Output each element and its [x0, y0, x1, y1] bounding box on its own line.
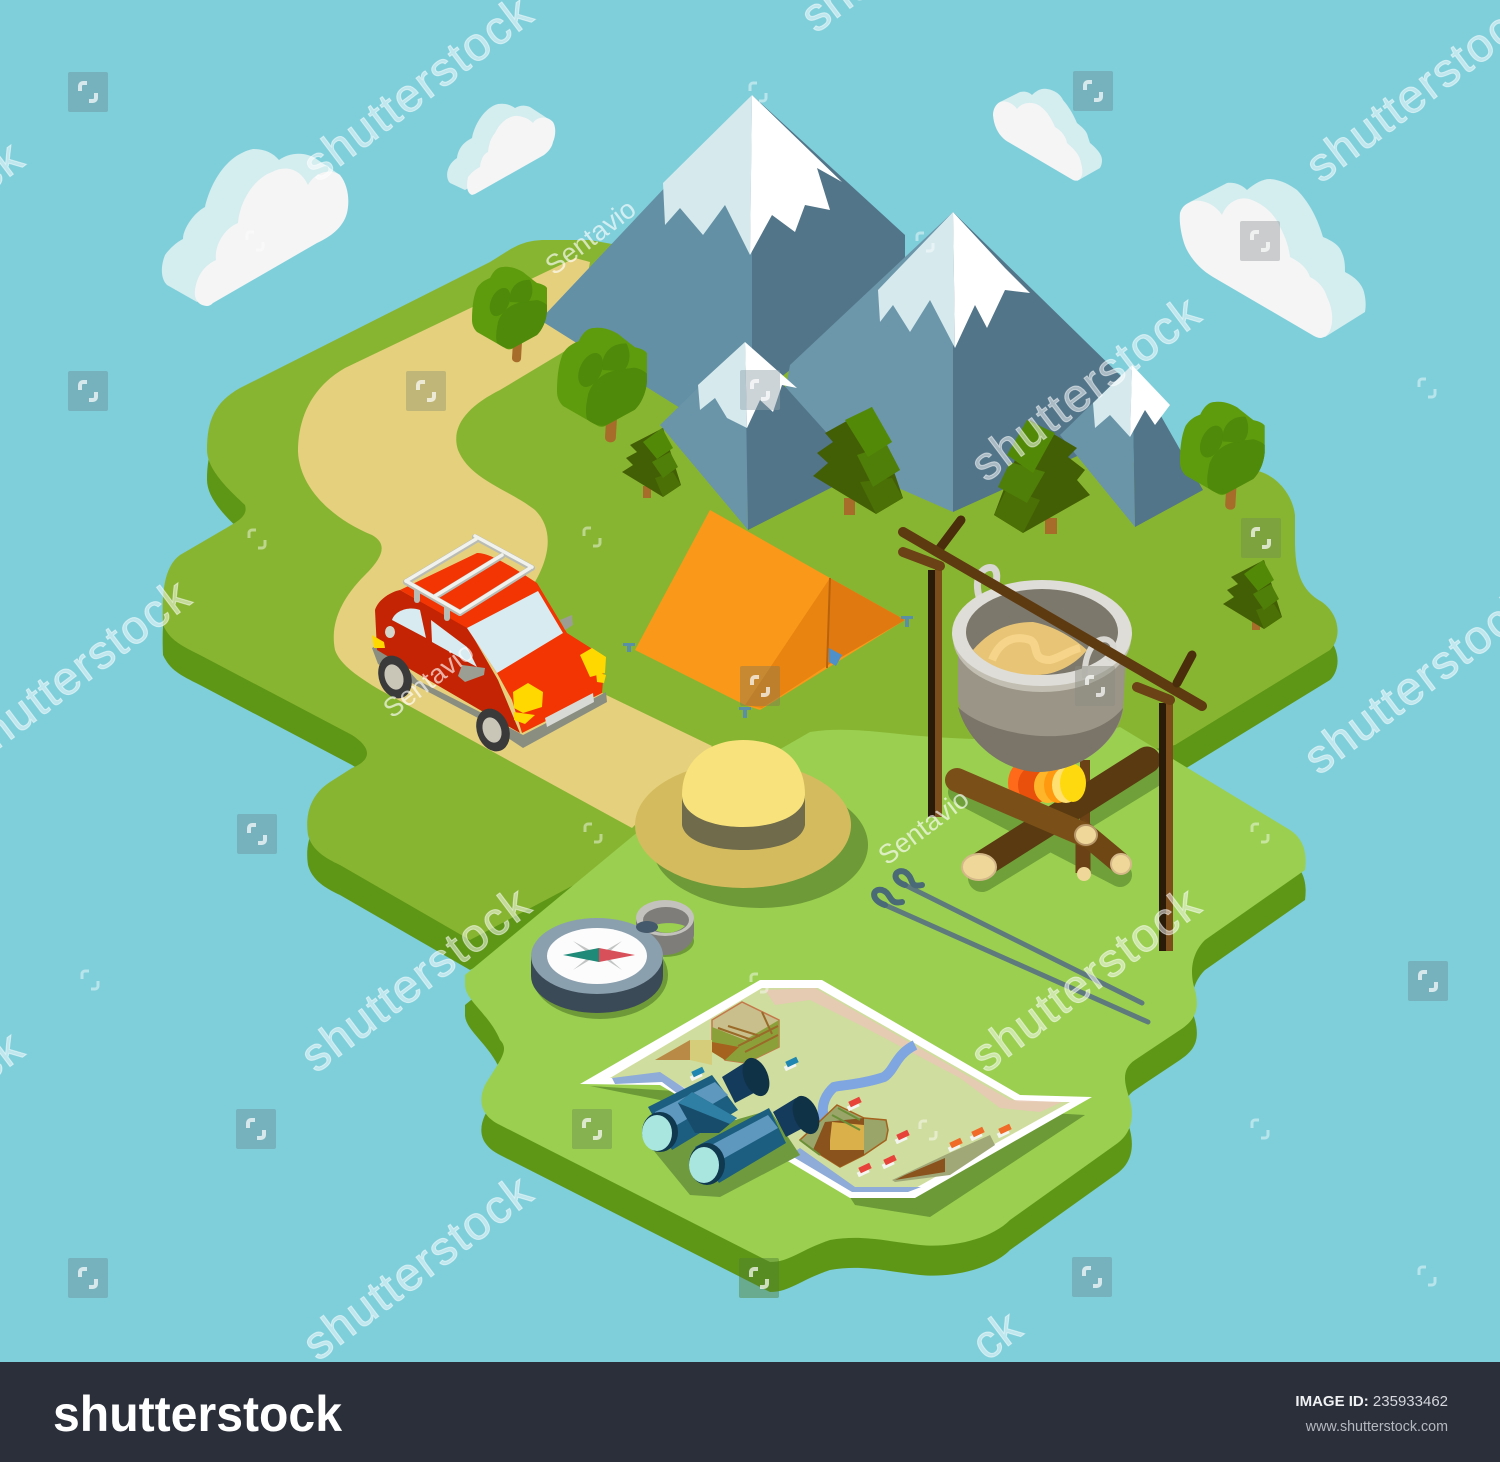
- map houses: [690, 1057, 1012, 1177]
- island: lower land side: [465, 757, 1306, 1292]
- dirt road: [298, 258, 712, 828]
- map terrain: lower hexagon: [800, 1105, 888, 1167]
- image id: IMAGE ID: 235933462: [1295, 1393, 1448, 1410]
- map: [580, 980, 1092, 1217]
- tree: round centre left: [557, 328, 647, 442]
- footer bar: [0, 1362, 1500, 1462]
- tree: round top left: [472, 267, 547, 362]
- fir tree: big right: [994, 420, 1090, 534]
- cooking pot: [952, 567, 1132, 772]
- watermark: square badges: [68, 71, 1448, 1298]
- cloud: top right small: [993, 89, 1102, 181]
- mountain: small centre: [660, 342, 862, 530]
- cloud: top centre: [447, 104, 555, 195]
- watermark: shutterstock text: ck: [961, 1299, 1031, 1370]
- hat: [635, 740, 868, 908]
- map terrain: upper hexagon: [655, 1002, 779, 1065]
- island: upper land side: [163, 270, 1338, 970]
- watermark: shutterstock text: shutterstock: [292, 1164, 542, 1370]
- binoculars: [642, 1054, 825, 1197]
- campfire front logs: [957, 780, 1131, 881]
- mountain: small right: [1060, 365, 1203, 527]
- fir tree: small right: [1223, 560, 1282, 630]
- watermark: Sentavio text: Sentavio: [378, 637, 480, 724]
- car: [372, 536, 607, 756]
- campfire back logs: [978, 760, 1147, 867]
- footer logo: shutterstock: [53, 1386, 342, 1442]
- watermark: shutterstock text: shutterstock: [960, 876, 1210, 1082]
- tent: [623, 510, 913, 718]
- watermark: Sentavio text: Sentavio: [873, 784, 975, 871]
- compass ring: [636, 900, 694, 957]
- watermark: small marks: [82, 83, 1435, 1285]
- watermark: shutterstock text: shutterstock: [960, 285, 1210, 491]
- cooking tripod: spit and right post: [903, 532, 1202, 951]
- skewers: [874, 871, 1148, 1022]
- fir tree: small left: [622, 428, 681, 498]
- mountain: large right: [780, 212, 1135, 512]
- cloud: top left large: [162, 149, 348, 306]
- island: upper land top: [163, 240, 1338, 940]
- website: www.shutterstock.com: [1305, 1419, 1448, 1435]
- fir tree: big centre: [813, 407, 903, 515]
- watermark: Sentavio text: [378, 194, 975, 871]
- roof rack: [406, 536, 532, 618]
- watermark: Sentavio text: Sentavio: [540, 194, 642, 281]
- mountain: large left: [540, 95, 905, 500]
- tree: round right: [1180, 402, 1265, 510]
- watermark: shutterstock text: shutterstock: [290, 876, 540, 1082]
- campfire shadow: [960, 775, 1150, 878]
- compass: [531, 900, 694, 1019]
- fire: [1008, 762, 1086, 804]
- cloud: right large: [1180, 179, 1366, 338]
- cooking tripod: left post: [903, 520, 961, 817]
- island: lower land top: [465, 727, 1306, 1262]
